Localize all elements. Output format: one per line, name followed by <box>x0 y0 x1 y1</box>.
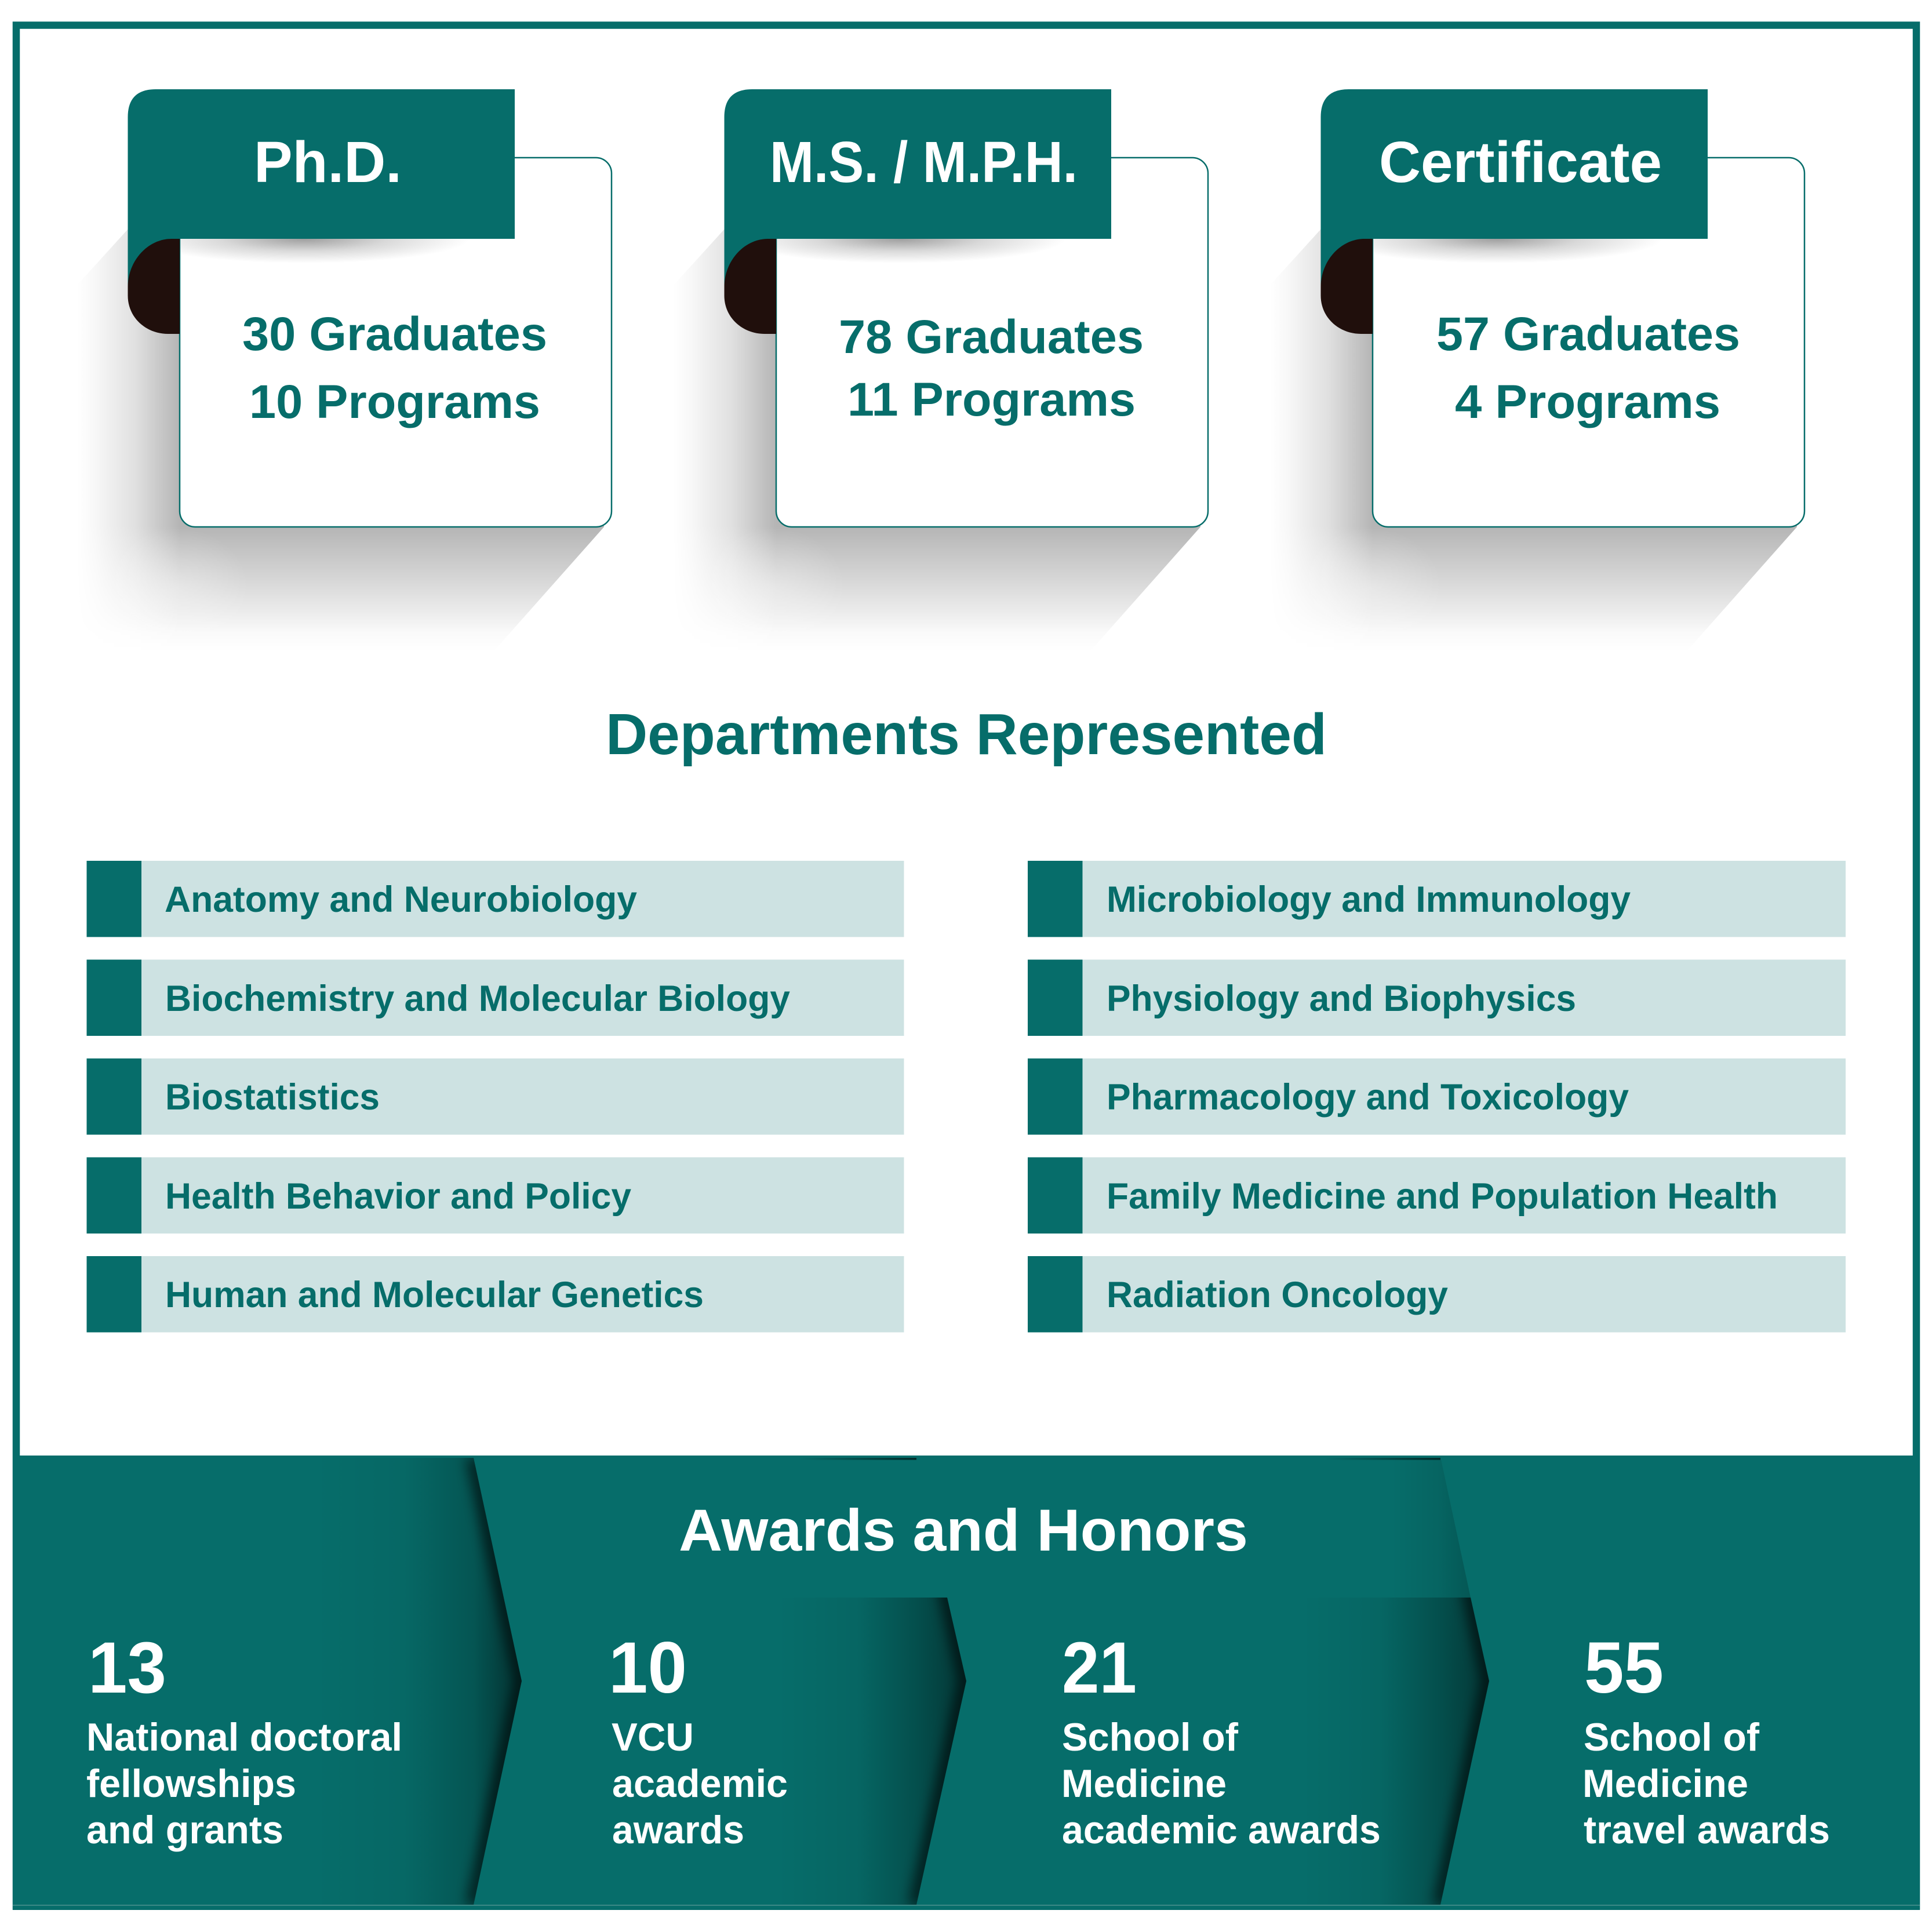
award: School of Medicine academic: Medicine <box>1061 1762 1227 1806</box>
ribbon fold <box>1320 239 1373 334</box>
ribbon shadow <box>1374 239 1681 264</box>
row: Biostatistics <box>87 1058 904 1135</box>
programs count: 4 Programs <box>1455 376 1720 428</box>
award: School of Medicine travel: 55 <box>1584 1628 1664 1708</box>
panel: Ph.D. card <box>77 89 612 655</box>
award: School of Medicine academic: School of <box>1062 1715 1238 1759</box>
award: VCU academic: awards <box>612 1808 744 1852</box>
programs count: 10 Programs <box>249 376 540 428</box>
row: Microbiology and Immunology: Microbiology and Immunology <box>1107 879 1631 920</box>
row: Human and Molecular Genetics: Human and Molecular Genetics <box>165 1275 704 1315</box>
row: Pharmacology and Toxicology <box>1028 1058 1846 1135</box>
award: national fellowships: National doctoral <box>86 1715 402 1759</box>
row: Health Behavior and Policy <box>87 1157 904 1234</box>
awards heading: Awards and Honors <box>679 1497 1248 1563</box>
ribbon <box>1320 89 1708 296</box>
row: Health Behavior and Policy: Health Behavior and Policy <box>165 1176 631 1217</box>
card long shadow <box>693 230 1200 628</box>
award: national fellowships <box>86 1628 402 1852</box>
row: Microbiology and Immunology <box>1028 861 1846 937</box>
chevron arrow 1 <box>416 1458 522 1905</box>
row: Human and Molecular Genetics <box>87 1256 904 1332</box>
panel: departments right column <box>1028 861 1846 1332</box>
graduates count: 78 Graduates <box>839 311 1144 363</box>
card title: M.S. / M.P.H. <box>770 130 1078 195</box>
award: national fellowships: and grants <box>86 1808 283 1852</box>
ribbon shadow <box>777 239 1084 264</box>
row: Family Medicine and Population Health: Family Medicine and Population Health <box>1107 1176 1778 1217</box>
ribbon <box>128 89 515 296</box>
award: School of Medicine academic <box>1061 1628 1381 1852</box>
award: School of Medicine travel: Medicine <box>1582 1762 1748 1806</box>
row: Physiology and Biophysics <box>1028 960 1846 1036</box>
row: Radiation Oncology <box>1028 1256 1846 1332</box>
row: Biochemistry and Molecular Biology <box>87 960 904 1036</box>
award: national fellowships: 13 <box>88 1628 166 1708</box>
award: VCU academic: academic <box>612 1762 788 1806</box>
award: School of Medicine academic: 21 <box>1062 1628 1137 1708</box>
panel: Certificate card <box>1269 89 1804 655</box>
row: Biochemistry and Molecular Biology: Biochemistry and Molecular Biology <box>165 978 790 1019</box>
award: VCU academic <box>609 1628 788 1852</box>
ribbon <box>725 89 1111 296</box>
award: VCU academic: VCU <box>612 1715 694 1759</box>
card body <box>1373 158 1804 527</box>
panel: M.S. / M.P.H. card <box>673 89 1208 655</box>
row: Radiation Oncology: Radiation Oncology <box>1107 1275 1448 1315</box>
award: School of Medicine travel <box>1582 1628 1830 1852</box>
card title: Ph.D. <box>254 130 402 195</box>
row: Physiology and Biophysics: Physiology and Biophysics <box>1107 978 1576 1019</box>
row: Pharmacology and Toxicology: Pharmacology and Toxicology <box>1107 1077 1629 1118</box>
graduates count: 30 Graduates <box>242 308 547 361</box>
programs count: 11 Programs <box>847 373 1136 426</box>
card long shadow <box>97 230 604 628</box>
chevron arrow 2 <box>814 1458 966 1905</box>
card long shadow <box>1290 230 1797 628</box>
award: School of Medicine travel: travel awards <box>1584 1808 1830 1852</box>
row: Family Medicine and Population Health <box>1028 1157 1846 1234</box>
ribbon fold <box>725 239 776 334</box>
card body <box>180 158 612 527</box>
award: School of Medicine academic: academic awards <box>1062 1808 1381 1852</box>
award: School of Medicine travel: School of <box>1584 1715 1759 1759</box>
award: national fellowships: fellowships <box>86 1762 296 1806</box>
row: Anatomy and Neurobiology: Anatomy and Neurobiology <box>165 879 637 920</box>
panel: Awards and Honors <box>13 1456 1920 1910</box>
graduates count: 57 Graduates <box>1436 308 1740 361</box>
chevron arrow 3 <box>1340 1458 1489 1905</box>
heading: Departments Represented: Departments Represented <box>606 702 1327 767</box>
awards background <box>13 1456 1920 1910</box>
card body <box>776 158 1208 527</box>
award: VCU academic: 10 <box>609 1628 687 1708</box>
card title: Certificate <box>1379 130 1662 195</box>
row: Biostatistics: Biostatistics <box>165 1077 380 1118</box>
ribbon fold <box>128 239 180 334</box>
ribbon shadow <box>181 239 488 264</box>
panel: departments left column <box>87 861 904 1332</box>
row: Anatomy and Neurobiology <box>87 861 904 937</box>
